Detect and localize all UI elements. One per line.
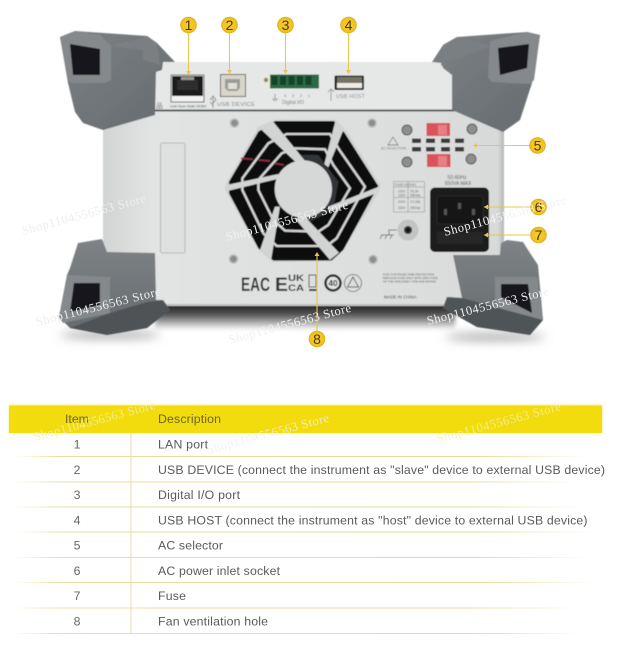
badge 3 — [277, 17, 294, 33]
USB host port — [328, 76, 365, 101]
badge 5 — [529, 137, 546, 154]
rear panel body — [103, 62, 504, 306]
badge 8: 8 — [313, 331, 321, 347]
fuse warning text: OF THE SPECIFIED TYPE AND RATING — [383, 280, 437, 284]
handle: bottom right — [443, 240, 543, 335]
fuse rating table: T3.15A — [410, 200, 421, 204]
store watermarks: Shop1104556563 Store — [32, 398, 157, 444]
digital I/O terminal — [262, 74, 319, 106]
badge 1 — [180, 17, 197, 33]
table header bar: Description — [158, 412, 221, 426]
table item numbers: 8 — [74, 614, 81, 628]
table header bar: Item — [65, 412, 89, 426]
table descriptions: AC power inlet socket — [158, 564, 281, 578]
fuse rating table: 230V — [398, 206, 406, 210]
power rating text: 50-60Hz — [448, 175, 467, 181]
power rating text: 650VA MAX — [445, 181, 472, 187]
AC selector — [381, 123, 477, 167]
certification marks — [241, 273, 362, 296]
USB host port: USB HOST — [336, 94, 365, 100]
store watermarks: Shop1104556563 Store — [442, 193, 568, 239]
badge 1: 1 — [185, 17, 193, 33]
USB device port: USB DEVICE — [217, 102, 255, 108]
store watermarks: Shop1104556563 Store — [227, 301, 353, 347]
handle: bottom left — [59, 239, 170, 335]
badge 2 — [221, 17, 238, 33]
fuse rating table: 250Vac — [410, 206, 421, 210]
table descriptions: USB HOST (connect the instrument as "host" device to external USB device) — [158, 514, 588, 528]
fuse warning text: REPLACE FUSE ONLY WITH 250V FUSE — [383, 276, 438, 280]
instrument photo — [59, 31, 545, 341]
LAN port: 品 — [156, 102, 163, 110]
made in china text: MADE IN CHINA — [384, 294, 417, 300]
blank label plate — [160, 143, 185, 253]
table descriptions: Fan ventilation hole — [158, 614, 268, 628]
store watermarks: Shop1104556563 Store — [224, 198, 350, 244]
table item numbers: 1 — [74, 438, 81, 452]
fuse rating table: 120V — [398, 194, 406, 198]
badge 4 — [340, 17, 357, 33]
store watermarks: Shop1104556563 Store — [435, 399, 563, 446]
badge 7 — [530, 227, 547, 243]
leader lines — [186, 32, 530, 331]
table item numbers: 5 — [74, 538, 81, 552]
table header bar — [9, 405, 602, 433]
fuse rating table: 100V — [398, 190, 406, 194]
AC selector: AC SELECTION — [381, 146, 406, 150]
certification marks: CA — [288, 283, 304, 294]
LAN port — [156, 75, 207, 110]
panel screws — [230, 119, 377, 264]
table descriptions: Fuse — [158, 589, 186, 603]
badge 4: 4 — [345, 17, 353, 33]
fuse rating table: T6.3A — [410, 190, 419, 194]
handle: top right — [432, 32, 540, 132]
badge 7: 7 — [535, 227, 543, 243]
certification marks: E — [275, 275, 288, 296]
badge 6: 6 — [535, 199, 543, 215]
table descriptions: AC selector — [158, 538, 223, 552]
fuse warning text — [383, 272, 438, 284]
USB device port — [210, 74, 255, 108]
fuse rating table — [394, 182, 424, 212]
fuse rating table: 250Vac — [410, 194, 421, 198]
fuse rating table: FUSE RATING — [395, 183, 417, 187]
fuse warning text: FOR CONTINUED FIRE PROTECTION — [383, 272, 434, 276]
badge 2: 2 — [226, 17, 234, 33]
badge 3: 3 — [282, 17, 290, 33]
table item numbers: 2 — [74, 463, 81, 477]
store watermarks: Shop1104556563 Store — [20, 191, 148, 238]
table descriptions: USB DEVICE (connect the instrument as "slave" device to external USB device) — [158, 463, 605, 477]
ground terminal — [380, 220, 418, 240]
digital I/O terminal: Digital I/O — [282, 100, 304, 106]
digital I/O terminal: 4 3 2 1 — [284, 93, 312, 98]
handle: top left — [60, 31, 175, 130]
foot shadows — [60, 331, 545, 341]
table item numbers: 3 — [74, 488, 81, 502]
badge 6 — [530, 199, 547, 215]
store watermarks: Shop1104556563 Store — [205, 411, 331, 457]
callout badges — [180, 17, 547, 347]
store watermarks — [20, 191, 568, 457]
table item numbers: 4 — [74, 514, 81, 528]
table descriptions — [158, 438, 605, 628]
fuse rating table: 220V — [398, 200, 406, 204]
store watermarks: Shop1104556563 Store — [425, 284, 550, 328]
certification marks: UK — [288, 273, 304, 284]
table item numbers: 7 — [74, 589, 81, 603]
power rating text — [445, 175, 472, 187]
table descriptions: Digital I/O port — [158, 488, 241, 502]
fan guard — [225, 119, 381, 262]
table item numbers — [74, 438, 81, 628]
table item numbers: 6 — [74, 564, 81, 578]
cast shadow under the instrument — [155, 302, 455, 330]
badge 5: 5 — [534, 138, 542, 154]
table descriptions: LAN port — [158, 438, 209, 452]
certification marks: 40 — [329, 279, 338, 288]
badge 8 — [309, 331, 325, 347]
LAN port: Link Num Note HDBX — [170, 104, 207, 108]
AC inlet socket and fuse holder — [430, 188, 489, 252]
store watermarks: Shop1104556563 Store — [34, 284, 162, 329]
table — [9, 405, 605, 634]
certification marks: EAC — [241, 275, 270, 296]
table rules — [15, 433, 595, 634]
